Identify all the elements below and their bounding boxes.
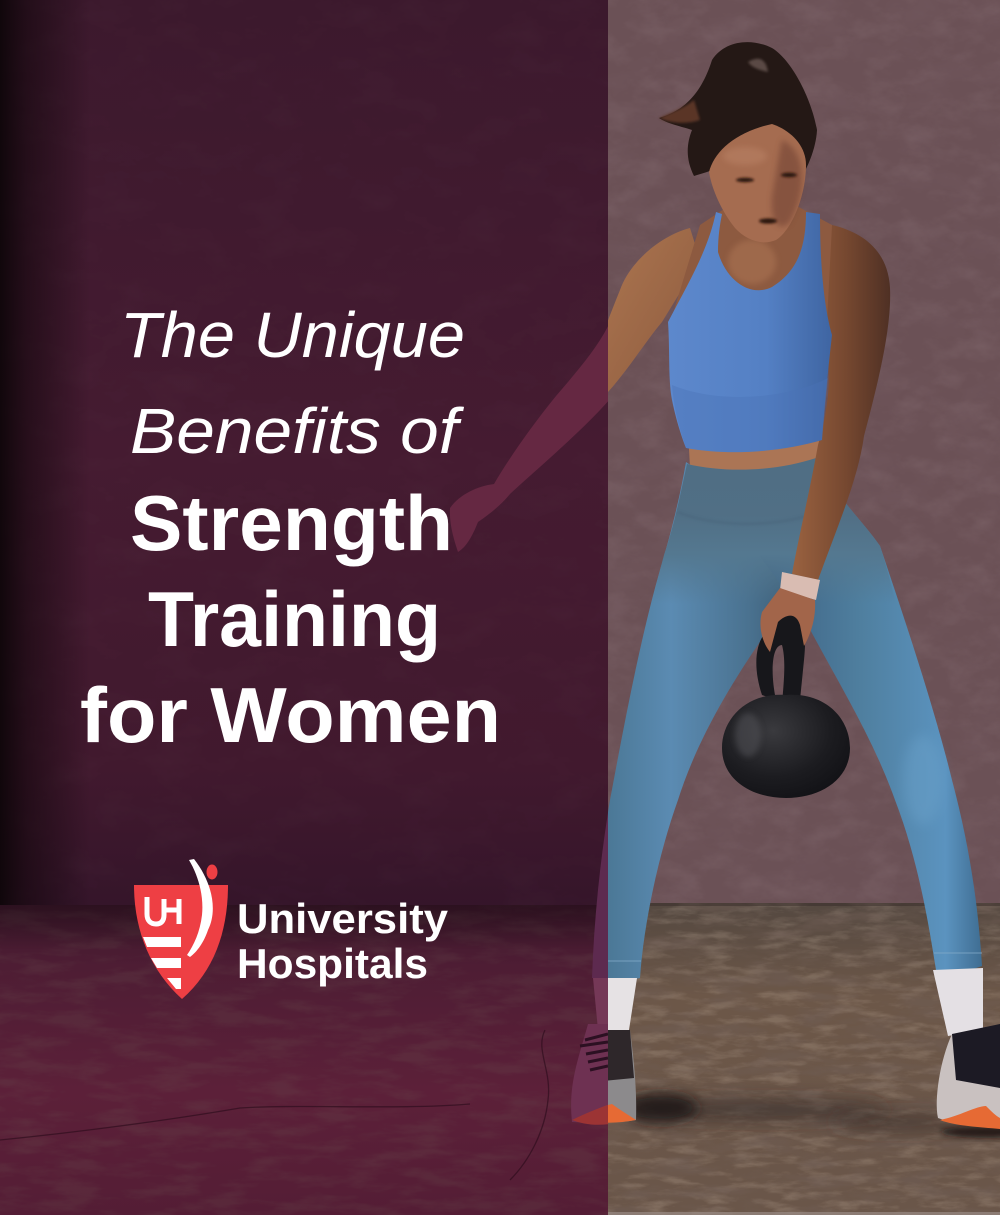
title: bold line one: Strength	[130, 479, 453, 567]
woman: midriff	[689, 441, 819, 470]
tinted sock	[593, 978, 608, 1024]
title	[80, 299, 501, 759]
woman: reddish flyaway hair	[659, 100, 700, 123]
tinted sole	[572, 1104, 610, 1125]
woman: knee highlight	[906, 744, 932, 816]
woman: chest highlight	[728, 240, 776, 284]
logo: red dot	[206, 864, 218, 880]
tinted arm and hand	[450, 318, 616, 552]
maroon panel	[0, 0, 608, 1215]
background photo: concrete floor	[600, 903, 1000, 1215]
woman: hand gripping kettlebell	[760, 588, 815, 652]
title: bold line three: for Women	[80, 671, 501, 759]
woman: far arm reaching left	[608, 228, 694, 392]
woman: smartwatch	[780, 572, 820, 600]
panel: shade at wall base	[0, 905, 608, 950]
woman: waistband lower edge	[678, 502, 838, 524]
woman: right legging hem	[934, 952, 982, 954]
woman: face shadow	[772, 140, 802, 226]
University Hospitals logo	[134, 859, 449, 999]
woman: hips and waistband	[656, 458, 892, 592]
woman: left sock	[608, 978, 637, 1030]
kettlebell	[722, 614, 850, 798]
woman lifting kettlebell	[572, 42, 1000, 1129]
woman seen through panel: arm, leg and shoe	[450, 326, 608, 1125]
panel: dark left edge	[0, 0, 90, 905]
woman: forehead highlight	[726, 149, 764, 163]
title: bold line two: Training	[148, 575, 441, 663]
panel: wall texture	[0, 0, 608, 905]
woman: crop top seam shading	[672, 378, 828, 452]
title: italic line one: The Unique	[120, 299, 465, 371]
tinted leg	[592, 814, 608, 978]
woman: hair and ponytail	[659, 42, 817, 176]
woman: leggings right leg	[810, 504, 982, 970]
woman: left shoe	[608, 1030, 636, 1123]
panel: floor texture	[0, 905, 608, 1215]
woman: right sock	[933, 968, 983, 1036]
logo: white stripes	[143, 937, 181, 989]
woman: left legging hem	[608, 960, 641, 962]
logo: red shield	[134, 885, 228, 999]
logo: UH lettering	[147, 897, 179, 924]
woman: near arm	[792, 225, 890, 580]
woman: head and face	[709, 124, 806, 242]
panel: floor area	[0, 905, 608, 1215]
panel: wall area	[0, 0, 608, 905]
woman: blue crop top	[668, 212, 832, 452]
tinted laces	[580, 1034, 608, 1070]
background photo: textured wall	[600, 0, 1000, 905]
logo: wordmark line two: Hospitals	[237, 940, 428, 987]
woman: neck and chest	[668, 205, 832, 340]
woman: right shoe	[937, 1024, 1000, 1129]
title: italic line two: Benefits of	[130, 395, 465, 467]
logo: white crescent	[187, 859, 213, 957]
tinted shoe	[571, 1024, 608, 1122]
logo: wordmark line one: University	[237, 895, 449, 942]
woman: eyes and mouth	[736, 173, 797, 224]
woman: hair highlight	[748, 59, 768, 72]
panel: floor cracks	[0, 1030, 549, 1180]
woman: leggings left leg	[608, 462, 780, 978]
